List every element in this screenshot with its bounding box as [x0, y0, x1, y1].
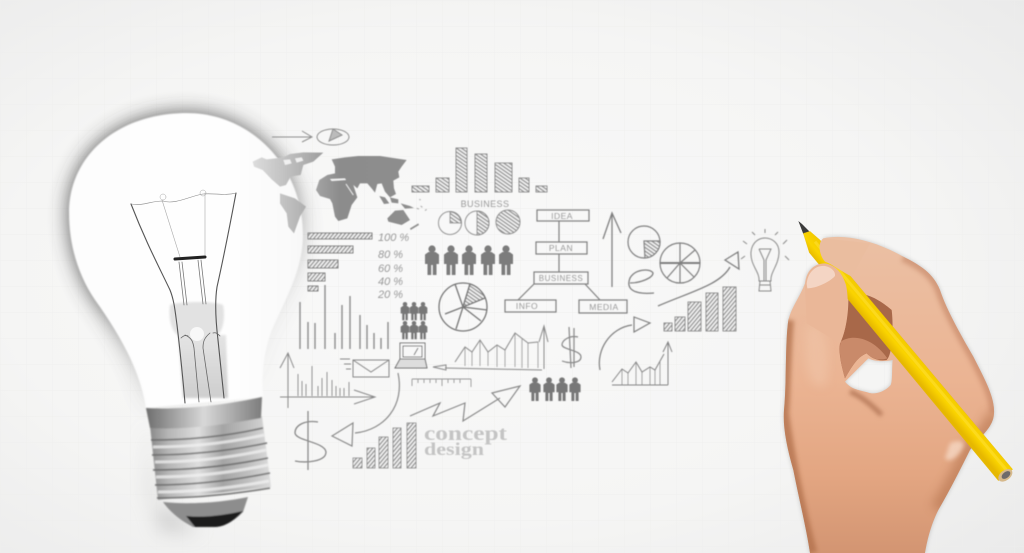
line chart with arrow	[433, 326, 548, 370]
stacked ladder bars	[353, 423, 416, 468]
percentage labels: 20 %	[377, 289, 403, 301]
laptop	[395, 343, 427, 368]
bulb glass	[69, 113, 303, 408]
percentage labels: 100 %	[378, 232, 409, 244]
world map	[253, 152, 427, 233]
large pie	[439, 283, 487, 331]
up arrow	[603, 213, 621, 287]
pie chart with hatched slice	[628, 226, 660, 258]
rising arrow	[658, 252, 739, 306]
bottom four people icons	[529, 377, 581, 401]
concept design text: concept	[424, 423, 507, 445]
flow chart: INFO	[516, 301, 538, 311]
pencil	[798, 221, 1015, 484]
six small people icons	[401, 302, 427, 339]
small dollar sign	[562, 327, 581, 368]
flow chart: MEDIA	[589, 302, 619, 312]
top hatched bar chart	[412, 148, 547, 192]
zigzag arrow	[410, 386, 520, 421]
segmented pie	[660, 243, 700, 283]
business label and pies	[438, 199, 520, 235]
hand shadow	[784, 237, 994, 553]
axes bar chart	[280, 353, 375, 408]
large dollar sign	[295, 411, 326, 470]
vertical line chart	[300, 285, 388, 349]
hand holding pencil	[783, 221, 1015, 553]
flow chart: PLAN	[549, 243, 573, 253]
rising hatched bars	[664, 287, 736, 331]
flow chart: IDEA	[551, 211, 573, 221]
flow chart	[505, 210, 627, 313]
curved arrow right	[599, 317, 650, 370]
light bulb	[69, 113, 303, 530]
percentage labels: 80 %	[378, 249, 403, 261]
concept design text: design	[424, 439, 484, 459]
percentage labels: 60 %	[378, 263, 403, 275]
arrow and small pie	[272, 129, 349, 145]
base shadow	[146, 420, 200, 530]
hand shape	[783, 237, 994, 553]
letter e	[629, 270, 654, 293]
curved arrow to dollar	[332, 373, 399, 446]
percentage labels	[377, 232, 409, 301]
concept design text	[424, 423, 507, 459]
flow chart: BUSINESS	[539, 274, 583, 283]
screw base	[146, 397, 271, 527]
percentage labels: 40 %	[378, 276, 403, 288]
five people icons	[425, 245, 513, 275]
business label and pies: BUSINESS	[461, 199, 509, 209]
bulb filament and stem	[131, 190, 236, 403]
ruler	[412, 379, 471, 387]
finger tips over pencil	[805, 238, 870, 343]
small bulb sketch	[741, 229, 789, 291]
envelope	[340, 359, 389, 377]
sketch doodles	[253, 129, 789, 470]
second line chart	[612, 342, 672, 385]
horizontal progress bars	[308, 233, 372, 291]
